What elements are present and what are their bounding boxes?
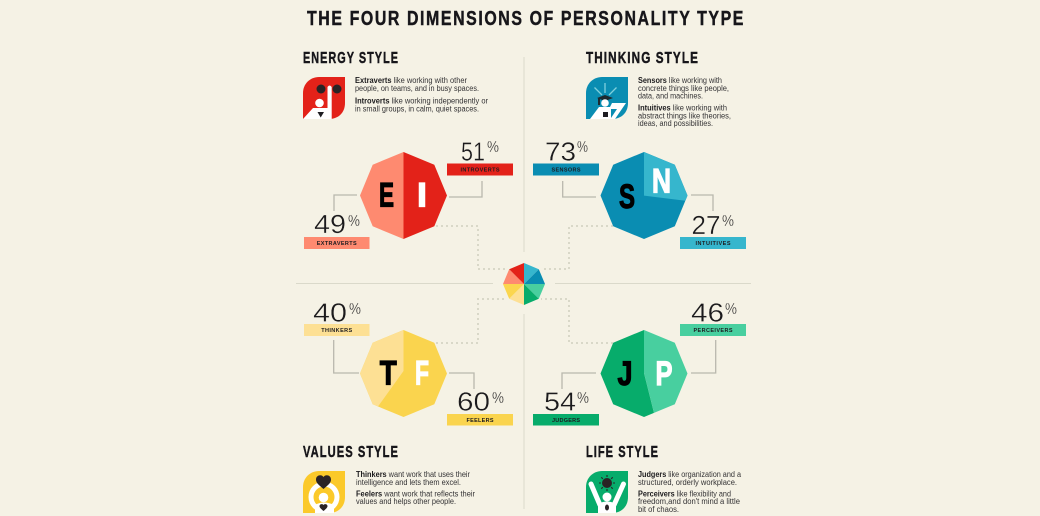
chart: energy octagon E I [360, 152, 447, 239]
heading: thinking style: THINKING STYLE [586, 50, 699, 67]
stat: judgers 54%: % [577, 390, 589, 407]
stat: thinkers 40%: THINKERS [321, 328, 353, 334]
text: values style description: intelligence and lets them excel. [356, 478, 461, 487]
chart: values octagon T F: F [415, 355, 429, 393]
stat: feelers 60%: FEELERS [466, 418, 494, 424]
text: energy style description [355, 76, 488, 114]
stat: intuitives 27%: 27 [692, 210, 720, 240]
stat: perceivers 46%: % [725, 301, 737, 318]
text: energy style description: people, on teams, and in busy spaces. [355, 84, 479, 93]
stat: judgers 54%: JUDGERS [552, 418, 580, 424]
stat: intuitives 27% [680, 195, 746, 249]
text: thinking style description: ideas, and possibilities. [638, 119, 713, 128]
stat: judgers 54% [533, 373, 599, 426]
stat: extraverts 49% [304, 195, 370, 249]
text: life style description: bit of chaos. [638, 505, 679, 514]
text: life style description: Judgers like organization and a [638, 470, 742, 479]
stat: thinkers 40% [304, 298, 370, 373]
stat: extraverts 49%: % [348, 213, 360, 230]
text: values style description [356, 470, 475, 506]
chart: thinking octagon S N: N [652, 162, 671, 200]
stat: thinkers 40%: % [349, 301, 361, 318]
chart: energy octagon E I: E [379, 176, 394, 214]
chart: centre octagon [503, 263, 545, 305]
chart: life octagon J P: J [618, 355, 632, 393]
text: life style description: structured, orderly workplace. [638, 478, 737, 487]
stat: sensors 73% [533, 136, 599, 197]
heading: energy style: ENERGY STYLE [303, 50, 399, 67]
panel: energy style [303, 50, 488, 119]
icon: values style figure [303, 471, 345, 513]
icon: thinking style figure [586, 77, 628, 119]
stat: introverts 51%: INTROVERTS [460, 168, 500, 174]
stat: extraverts 49%: EXTRAVERTS [317, 241, 357, 247]
icon: energy style figure [303, 77, 345, 119]
text: values style description: Feelers want work that reflects their [356, 490, 475, 498]
stat: intuitives 27%: % [722, 213, 734, 230]
text: thinking style description: concrete things like people, [638, 84, 729, 93]
text: thinking style description: abstract things like theories, [638, 112, 731, 120]
text: life style description: freedom,and don't mind a little [638, 497, 741, 506]
stat: judgers 54%: 54 [544, 387, 576, 417]
stat: sensors 73%: 73 [545, 136, 576, 166]
chart: life octagon J P: P [656, 355, 672, 393]
text: life style description [638, 470, 742, 514]
title: THE FOUR DIMENSIONS OF PERSONALITY TYPE [307, 8, 745, 30]
panel: values style [303, 444, 475, 513]
text: energy style description: Introverts like working independently or [355, 96, 488, 106]
chart: values octagon T F [360, 330, 447, 417]
text: energy style description: Extraverts like working with other [355, 76, 467, 85]
stat: extraverts 49%: 49 [314, 209, 346, 239]
panel: thinking style [586, 50, 731, 128]
stat: introverts 51% [447, 137, 513, 197]
icon: life style figure [586, 471, 628, 513]
stat: feelers 60% [447, 373, 513, 426]
stat: thinkers 40%: 40 [313, 298, 347, 328]
text: values style description: values and helps other people. [356, 497, 456, 506]
heading: life style: LIFE STYLE [586, 444, 659, 461]
dotted connectors to centre [436, 226, 613, 343]
heading: values style: VALUES STYLE [303, 444, 399, 461]
text: thinking style description: Sensors like working with [638, 76, 722, 85]
stat: perceivers 46%: 46 [691, 298, 724, 328]
stat: perceivers 46% [680, 298, 746, 373]
text: life style description: Perceivers like flexibility and [638, 490, 731, 498]
stat: intuitives 27%: INTUITIVES [696, 241, 731, 247]
stat: perceivers 46%: PERCEIVERS [694, 328, 733, 334]
text: thinking style description [638, 76, 731, 128]
chart: life octagon J P [600, 330, 688, 417]
chart: values octagon T F: T [380, 355, 397, 393]
chart: thinking octagon S N: S [619, 178, 635, 216]
chart: energy octagon E I: I [417, 176, 427, 214]
stat: feelers 60%: 60 [457, 387, 490, 417]
stat: introverts 51%: 51 [461, 137, 485, 167]
stat: introverts 51%: % [487, 139, 499, 156]
text: thinking style description: data, and machines. [638, 92, 703, 100]
stat: sensors 73%: % [577, 139, 588, 156]
text: values style description: Thinkers want work that uses their [356, 470, 470, 479]
text: thinking style description: Intuitives like working with [638, 104, 727, 112]
stat: feelers 60%: % [492, 390, 504, 407]
stat: sensors 73%: SENSORS [552, 168, 581, 174]
text: energy style description: in small groups, in calm, quiet spaces. [355, 104, 479, 114]
panel: life style [586, 444, 742, 514]
chart: thinking octagon S N [600, 152, 688, 239]
